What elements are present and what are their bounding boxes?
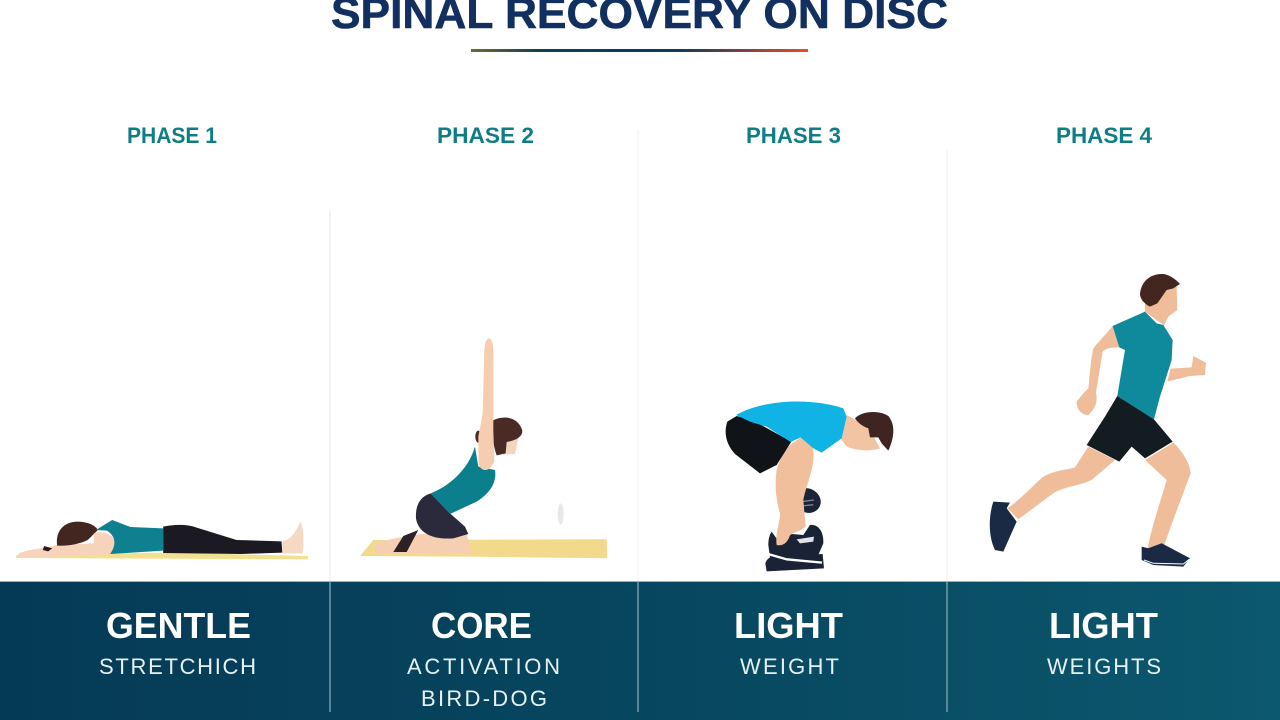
panel text: core activation: ACTIVATION	[407, 654, 560, 679]
panel text: core activation: BIRD-DOG	[421, 686, 547, 711]
bottom band	[0, 581, 1280, 720]
panel text: gentle stretching: STRETCHICH	[99, 654, 256, 679]
panel text: light weight: WEIGHT	[740, 654, 839, 679]
title underline	[471, 49, 808, 52]
figure: phase 4 runner	[990, 274, 1206, 567]
panel text: light weight: LIGHT	[734, 605, 843, 646]
phase labels: PHASE 2	[437, 123, 534, 148]
panel text: light weights	[1047, 605, 1161, 679]
phase labels: PHASE 1	[127, 123, 217, 148]
panel text: light weights: LIGHT	[1049, 605, 1158, 646]
figure: phase 3 bent-over dumbbell lift	[726, 402, 893, 571]
panel text: gentle stretching	[99, 605, 256, 679]
phase labels	[127, 123, 1153, 148]
panel text: light weights: WEIGHTS	[1047, 654, 1161, 679]
phase labels: PHASE 3	[746, 123, 841, 148]
phase labels: PHASE 4	[1056, 123, 1153, 148]
panel text: core activation: CORE	[431, 605, 532, 646]
figure: phase 1 lying stretch	[16, 520, 308, 559]
panel text: gentle stretching: GENTLE	[106, 605, 251, 646]
figure: phase 2 kneeling arm raise	[360, 338, 607, 558]
panel text: core activation	[407, 605, 560, 711]
panel text: light weight	[734, 605, 843, 679]
